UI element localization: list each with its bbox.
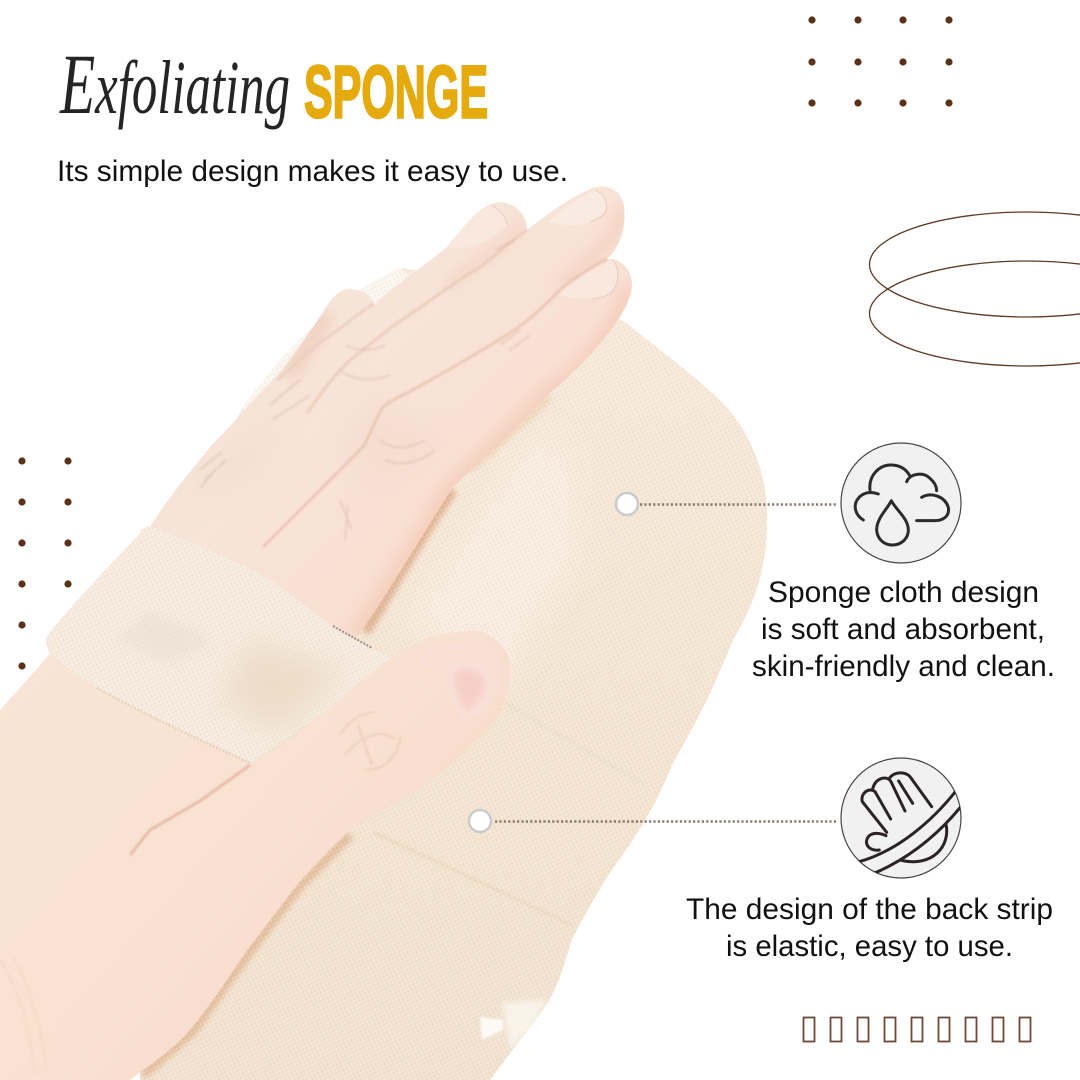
knuckle wrinkles (200, 240, 530, 540)
placeholder glyph boxes: bottom right (804, 1018, 1030, 1042)
leader line (495, 820, 838, 823)
subtitle: Its simple design makes it easy to use. (57, 155, 568, 188)
elastic back strip (46, 526, 392, 763)
caption: is soft and absorbent, (761, 613, 1045, 646)
sponge pad (140, 268, 767, 1080)
caption: The design of the back strip (686, 893, 1053, 926)
marker dot (469, 810, 491, 832)
caption: is elastic, easy to use. (726, 930, 1013, 963)
shading along fingers (357, 285, 632, 637)
lower hand (0, 654, 310, 1080)
caption (752, 576, 1055, 683)
title (59, 36, 488, 134)
leader line (640, 503, 838, 506)
product photo: hand holding exfoliating sponge (0, 186, 767, 1080)
icon: cloud and water drop (841, 443, 961, 563)
caption (686, 893, 1053, 963)
caption: skin-friendly and clean. (752, 650, 1055, 683)
decorative ellipses (870, 212, 1080, 366)
script word: Exfoliating: Exfoliating (59, 36, 290, 132)
back of hand and fingers (140, 186, 632, 640)
caption: Sponge cloth design (768, 576, 1039, 609)
callout: back strip (469, 758, 1053, 963)
finger separations (307, 230, 527, 413)
thumb crease (130, 765, 250, 855)
icon: hand with strip (841, 758, 962, 878)
callout: sponge cloth (616, 443, 1055, 683)
finger nails (476, 190, 618, 300)
marker dot (616, 493, 638, 515)
decorative dot grid: left (18, 457, 72, 670)
thumb nail (420, 641, 500, 723)
thumb knuckle wrinkles (340, 712, 400, 770)
thumb (60, 631, 510, 1072)
decorative dot grid: top right (808, 16, 953, 107)
bold word: SPONGE: SPONGE (304, 50, 488, 134)
